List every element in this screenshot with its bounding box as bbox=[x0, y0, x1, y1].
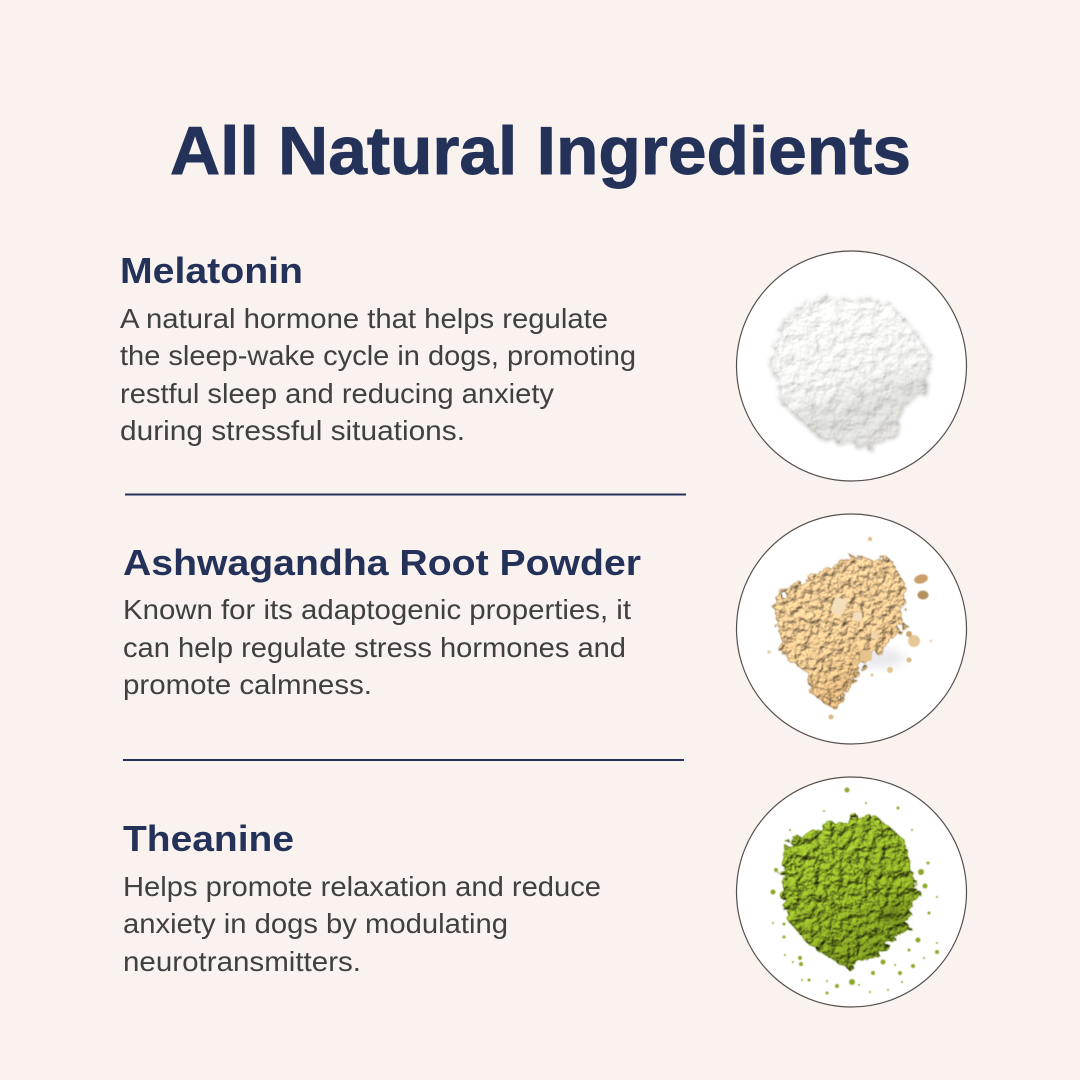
icon: green theanine powder circle bbox=[736, 777, 966, 1007]
title: All Natural Ingredients bbox=[170, 113, 911, 189]
heading: Melatonin: Melatonin bbox=[120, 250, 303, 291]
text block: ashwagandha description: can help regulate stress hormones and bbox=[123, 632, 626, 663]
text block: melatonin description: restful sleep and reducing anxiety bbox=[120, 378, 554, 409]
text block: theanine description: neurotransmitters. bbox=[123, 946, 361, 977]
text block: ashwagandha description: Known for its adaptogenic properties, it bbox=[123, 594, 631, 625]
text block: melatonin description: A natural hormone that helps regulate bbox=[120, 303, 608, 334]
icon: white melatonin powder circle bbox=[736, 251, 966, 481]
text block: ashwagandha description bbox=[123, 594, 631, 700]
text block: theanine description: anxiety in dogs by modulating bbox=[123, 908, 508, 939]
text block: theanine description: Helps promote relaxation and reduce bbox=[123, 871, 601, 902]
powder chunks bbox=[768, 537, 932, 720]
text block: theanine description bbox=[123, 871, 601, 977]
panel: ashwagandha text bbox=[123, 542, 641, 700]
panel: melatonin text bbox=[120, 250, 636, 446]
icon: tan ashwagandha powder circle bbox=[736, 514, 966, 744]
infographic canvas bbox=[120, 124, 968, 1008]
text block: melatonin description: the sleep-wake cycle in dogs, promoting bbox=[120, 340, 636, 371]
text block: melatonin description bbox=[120, 303, 636, 446]
heading: Theanine: Theanine bbox=[123, 818, 294, 859]
text block: melatonin description: during stressful situations. bbox=[120, 415, 465, 446]
panel: theanine text bbox=[123, 818, 601, 977]
powder specks bbox=[770, 788, 939, 994]
heading: Ashwagandha Root Powder: Ashwagandha Root Powder bbox=[123, 542, 641, 583]
text block: ashwagandha description: promote calmness. bbox=[123, 669, 372, 700]
